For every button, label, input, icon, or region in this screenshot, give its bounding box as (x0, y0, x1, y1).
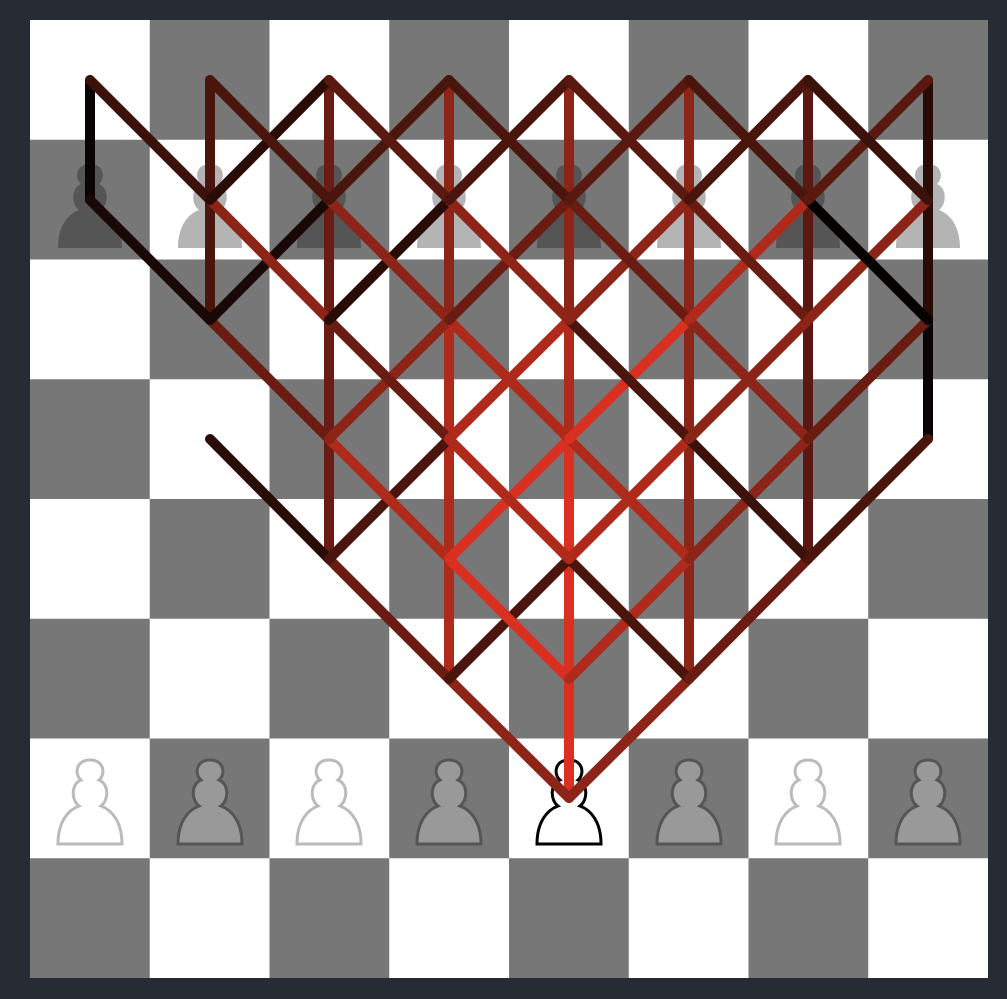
white pawns row (58, 760, 960, 844)
black pawns row (58, 164, 960, 248)
move paths network (90, 80, 928, 798)
